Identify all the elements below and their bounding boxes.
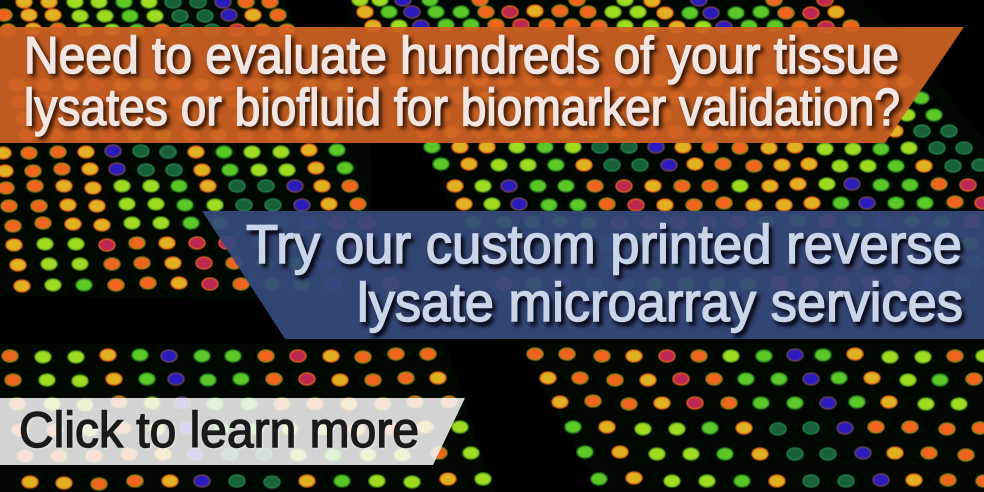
- call to action text: Click to learn more: [19, 402, 419, 458]
- grey call-to-action banner: [0, 398, 465, 465]
- orange banner: question: [0, 27, 964, 143]
- offer line 1: Try our custom printed reverse: [246, 213, 962, 275]
- heading line 2: lysates or biofluid for biomarker validation?: [24, 79, 900, 137]
- offer line 2: lysate microarray services: [357, 271, 963, 333]
- blue banner: service offer: [202, 211, 984, 339]
- heading line 1: Need to evaluate hundreds of your tissue: [24, 27, 899, 85]
